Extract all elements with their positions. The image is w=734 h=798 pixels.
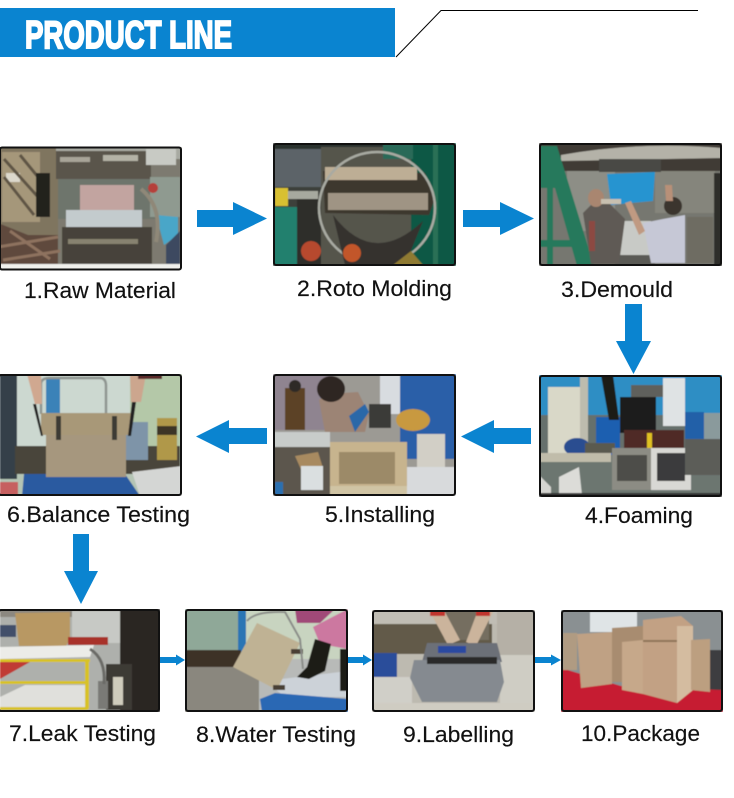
title: PRODUCT LINE <box>25 14 232 57</box>
header banner <box>0 8 395 57</box>
small arrow 9 to 10 <box>535 654 561 666</box>
arrow 5 to 6 <box>196 420 267 453</box>
arrow 1 to 2 <box>197 202 267 235</box>
label 6: 6.Balance Testing <box>7 502 190 527</box>
photo 9: labelling <box>372 610 535 712</box>
photo 6: balance testing <box>0 374 182 496</box>
small arrow 8 to 9 <box>348 654 372 666</box>
label 8: 8.Water Testing <box>196 722 356 747</box>
photo 8: water testing <box>185 609 348 712</box>
photo 1: raw material <box>0 147 182 270</box>
label 3: 3.Demould <box>561 277 673 302</box>
photo 2: roto molding <box>273 143 456 266</box>
photo 4: foaming <box>539 375 722 497</box>
photo 7: leak testing <box>0 609 160 712</box>
header decorative angled line <box>396 10 698 57</box>
photo 3: demould <box>539 143 722 266</box>
label 1: 1.Raw Material <box>24 278 176 303</box>
arrow 2 to 3 <box>463 202 534 235</box>
arrow 3 to 4 <box>616 304 651 374</box>
label 7: 7.Leak Testing <box>9 721 156 746</box>
arrow 4 to 5 <box>461 420 531 453</box>
label 2: 2.Roto Molding <box>297 276 452 301</box>
photo 10: package <box>561 610 723 712</box>
label 5: 5.Installing <box>325 502 435 527</box>
label 10: 10.Package <box>581 721 700 746</box>
arrow 6 to 7 <box>64 534 98 604</box>
label 9: 9.Labelling <box>403 722 514 747</box>
photo 5: installing <box>273 374 456 496</box>
small arrow 7 to 8 <box>160 654 185 666</box>
label 4: 4.Foaming <box>585 503 693 528</box>
